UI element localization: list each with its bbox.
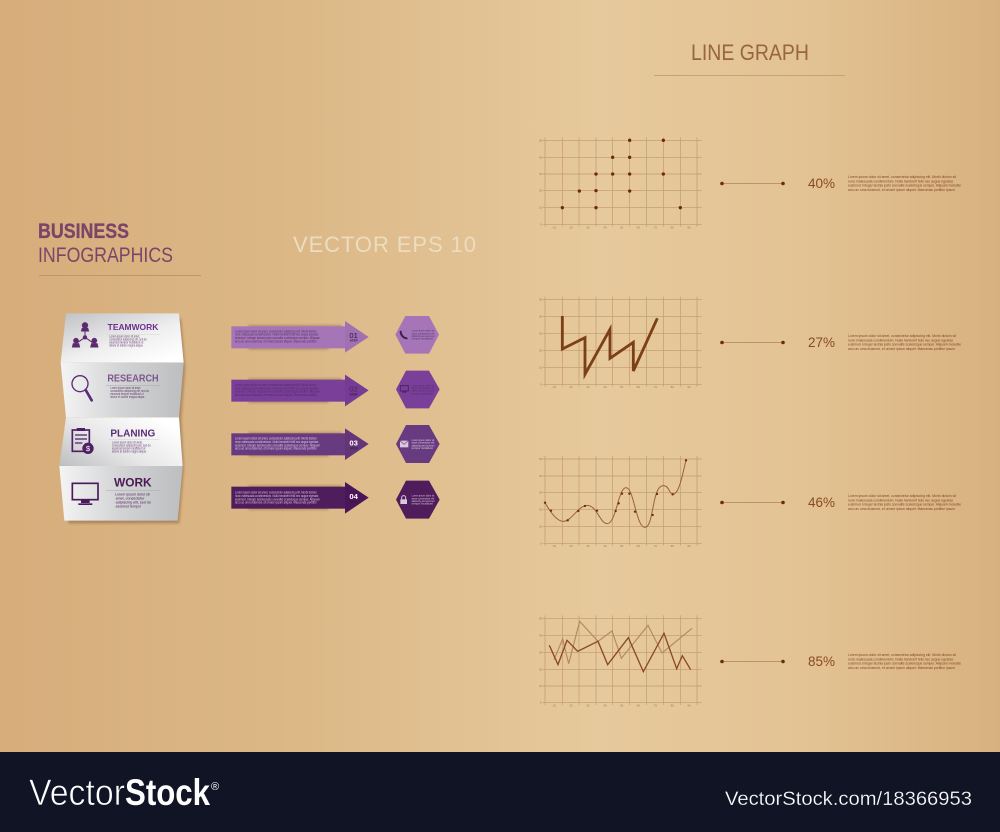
logo: Vector [29, 772, 125, 813]
stat row: 85% [720, 652, 962, 670]
chart: two line series: 30 [586, 704, 590, 708]
stat row: 46%: euismod. Integer lacinia justo convallis scelerisque semper. Aliquam molestie [848, 502, 962, 507]
stat row: 40%: Lorem ipsum dolor sit amet, consectetur adipiscing elit. Morbi dictum sit [848, 174, 957, 179]
arrow: step 02: euismod. Integer lacinia justo convallis scelerisque semper. Aliquam [235, 390, 320, 394]
chart: two line series: 70 [654, 704, 657, 708]
hexagon: monitor: adipiscing sed eiusmod [412, 389, 435, 393]
panel: work [59, 466, 183, 521]
footer bar [0, 752, 1000, 832]
title: business infographics: INFOGRAPHICS [38, 244, 173, 267]
hexagon: mail: Lorem ipsum dolor sit [412, 438, 435, 442]
text: teamwork [109, 335, 147, 348]
logo [29, 772, 219, 813]
chart: thick zigzag line: 30 [539, 331, 543, 335]
chart: scatter plot: 30 [586, 226, 590, 230]
chart: scatter plot: 40 [603, 226, 607, 230]
text: work: adipiscing elit, sed do [116, 501, 151, 505]
hexagon: phone: adipiscing sed eiusmod [412, 334, 435, 338]
hexagon: monitor: tempor incididunt [412, 391, 433, 395]
chart: smooth curve: 10 [539, 524, 543, 528]
chart: two line series: 10 [553, 704, 556, 708]
icon: monitor [72, 483, 98, 505]
chart: smooth curve: 50 [620, 544, 624, 548]
arrow: step 01: nunc malesuada condimentum. Nulla hendrerit felis nec augue egestas [235, 333, 319, 337]
hexagon: monitor: amet consectetur elit [412, 386, 435, 390]
arrow: step 02: STEP [350, 393, 358, 397]
chart: thick zigzag line: 20 [569, 385, 573, 389]
stat row: 40%: euismod. Integer lacinia justo convallis scelerisque semper. Aliquam molestie [848, 183, 962, 188]
arrow: step 04: nunc malesuada condimentum. Nulla hendrerit felis nec augue egestas [235, 494, 319, 498]
heading: vector eps 10: VECTOR EPS 10 [293, 232, 476, 257]
stat row: 46%: 46% [808, 495, 835, 510]
arrow: step 03: euismod. Integer lacinia justo convallis scelerisque semper. Aliquam [235, 443, 320, 447]
chart: smooth curve: 60 [637, 544, 640, 548]
text: research [110, 386, 149, 399]
hexagon: phone: amet consectetur elit [412, 331, 435, 335]
arrow: step 04 [231, 482, 369, 514]
arrow: step 03: 03 [349, 438, 358, 447]
stat row: 85%: Lorem ipsum dolor sit amet, consectetur adipiscing elit. Morbi dictum sit [848, 652, 957, 657]
arrow: step 04: euismod. Integer lacinia justo convallis scelerisque semper. Aliquam [235, 497, 320, 501]
icon: clipboard with dollar: $ [86, 444, 91, 453]
chart: two line series: 50 [620, 704, 624, 708]
chart: two line series: 90 [687, 704, 691, 708]
chart: scatter plot: 30 [539, 172, 543, 176]
text: planing: Lorem ipsum dolor sit amet, [112, 440, 143, 444]
hexagon: phone: tempor incididunt [412, 337, 433, 341]
stat row: 27%: Lorem ipsum dolor sit amet, consectetur adipiscing elit. Morbi dictum sit [848, 333, 957, 338]
text: planing: consectetur adipiscing elit, sed do [112, 443, 151, 447]
text: work: Lorem ipsum dolor sit [115, 492, 151, 496]
stat row: 40% [720, 174, 962, 192]
text: research: labore et dolore magna aliqua [110, 395, 145, 399]
hexagon: lock: Lorem ipsum dolor sit [412, 494, 435, 498]
chart: smooth curve: 40 [603, 544, 607, 548]
chart: two line series: 40 [603, 704, 607, 708]
text: planing [112, 440, 151, 453]
chart: smooth curve: 40 [539, 474, 543, 478]
chart: thick zigzag line: 0 [540, 382, 542, 386]
stat row: 27% [720, 333, 962, 351]
arrow: step 04: Lorem ipsum dolor sit amet, consectetur adipiscing elit. Morbi dictum [235, 491, 317, 495]
chart: two line series: 20 [539, 667, 543, 671]
panel: folded paper [59, 313, 185, 523]
text: teamwork: Lorem ipsum dolor sit amet, [109, 335, 140, 339]
text: teamwork: labore et dolore magna aliqua [109, 344, 143, 348]
chart: thick zigzag line: 50 [539, 298, 543, 302]
stat row: 27%: euismod. Integer lacinia justo convallis scelerisque semper. Aliquam molestie [848, 342, 962, 347]
chart: scatter plot: 60 [637, 226, 640, 230]
chart: two line series: 60 [637, 704, 640, 708]
logo: ® [211, 781, 219, 793]
hexagon: phone: Lorem ipsum dolor sit [412, 329, 435, 333]
chart: smooth curve: 90 [687, 544, 691, 548]
arrow: step 03: Lorem ipsum dolor sit amet, consectetur adipiscing elit. Morbi dictum [235, 437, 317, 441]
stat row: 85%: 85% [808, 654, 835, 669]
arrow: step 01: STEP [350, 339, 358, 343]
chart: thick zigzag line: 70 [654, 385, 657, 389]
panel: teamwork [61, 313, 184, 363]
image id: VectorStock.com/18366953 [725, 788, 972, 810]
arrow: step 01: euismod. Integer lacinia justo convallis scelerisque semper. Aliquam [235, 336, 320, 340]
stat row: 46% [720, 493, 962, 511]
chart: two line series: 50 [539, 616, 543, 620]
chart: thick zigzag line: 10 [553, 385, 556, 389]
chart: smooth curve: 10 [553, 544, 556, 548]
chart: thick zigzag line: 80 [671, 385, 674, 389]
arrow: step 03 [231, 428, 369, 460]
chart: scatter plot: 50 [539, 138, 543, 142]
chart: scatter plot: 10 [539, 206, 543, 210]
chart: scatter plot: 40 [539, 155, 543, 159]
hexagon: mail [396, 425, 440, 463]
stat row: 85%: nunc malesuada condimentum. Nulla hendrerit felis nec augue egestas [848, 656, 953, 661]
stat row: 27%: 27% [808, 335, 835, 350]
text: work: eiusmod tempor [116, 505, 142, 509]
chart: smooth curve: 0 [540, 541, 542, 545]
icon: magnifier [72, 376, 92, 400]
hexagon: mail: adipiscing sed eiusmod [412, 443, 435, 447]
chart: thick zigzag line: 50 [620, 385, 624, 389]
panel: planing [59, 417, 183, 466]
stat row: 46%: nunc malesuada condimentum. Nulla hendrerit felis nec augue egestas [848, 497, 953, 502]
hexagon: mail: tempor incididunt [412, 446, 433, 450]
chart: thick zigzag line: 40 [539, 315, 543, 319]
arrow: step 02: Lorem ipsum dolor sit amet, consectetur adipiscing elit. Morbi dictum [235, 383, 317, 387]
chart: thick zigzag line: 90 [687, 385, 691, 389]
chart: scatter plot: 80 [671, 226, 674, 230]
heading: work: WORK [114, 477, 152, 490]
chart: smooth curve: 70 [654, 544, 657, 548]
chart: scatter plot: 20 [569, 226, 573, 230]
stat row: 46%: arcu ac urna euismod, et ornare ipsum aliquet. Maecenas porttitor ipsum [848, 506, 956, 511]
arrow: step 03: arcu ac urna euismod, et ornare ipsum aliquet. Maecenas porttitor [235, 447, 317, 451]
title: business infographics [38, 220, 201, 276]
chart: scatter plot: 10 [553, 226, 556, 230]
chart: smooth curve: 20 [539, 508, 543, 512]
stat row: 40%: arcu ac urna euismod, et ornare ipsum aliquet. Maecenas porttitor ipsum [848, 187, 956, 192]
text: research: Lorem ipsum dolor sit amet, [110, 386, 141, 390]
chart: thick zigzag line: 20 [539, 348, 543, 352]
stat row: 27%: nunc malesuada condimentum. Nulla hendrerit felis nec augue egestas [848, 337, 953, 342]
icon: team [72, 322, 98, 347]
chart: two line series: 30 [539, 650, 543, 654]
chart: scatter plot: 20 [539, 189, 543, 193]
arrow: step 03: nunc malesuada condimentum. Nulla hendrerit felis nec augue egestas [235, 440, 319, 444]
chart: scatter plot: 70 [654, 226, 657, 230]
arrow: step 02: nunc malesuada condimentum. Nulla hendrerit felis nec augue egestas [235, 386, 319, 390]
arrow: step 01: Lorem ipsum dolor sit amet, consectetur adipiscing elit. Morbi dictum [235, 329, 317, 333]
chart: two line series: 20 [569, 704, 573, 708]
hexagon: lock: tempor incididunt [412, 502, 433, 506]
arrow: step 01: arcu ac urna euismod, et ornare ipsum aliquet. Maecenas porttitor [235, 339, 317, 343]
text: teamwork: consectetur adipiscing elit, sed do [109, 338, 147, 342]
text: work [115, 492, 151, 509]
logo: Stock [125, 772, 210, 813]
hexagon: monitor: Lorem ipsum dolor sit [412, 383, 435, 387]
text: work: amet, consectetur [116, 497, 145, 501]
chart: scatter plot [539, 137, 702, 230]
stat row: 85%: euismod. Integer lacinia justo convallis scelerisque semper. Aliquam molestie [848, 661, 962, 666]
arrow: step 01: 01 [349, 331, 358, 340]
chart: two line series: 10 [539, 684, 543, 688]
chart: smooth curve: 80 [671, 544, 674, 548]
arrow: step 04: arcu ac urna euismod, et ornare ipsum aliquet. Maecenas porttitor [235, 501, 317, 505]
panel: research [61, 363, 184, 417]
chart: two line series [539, 615, 702, 708]
chart: thick zigzag line [539, 297, 702, 389]
chart: smooth curve: 30 [539, 491, 543, 495]
stat row: 40%: 40% [808, 176, 835, 191]
arrow: step 02: 02 [349, 385, 358, 394]
stat row: 27%: arcu ac urna euismod, et ornare ipsum aliquet. Maecenas porttitor ipsum [848, 346, 956, 351]
title: line graph: LINE GRAPH [691, 40, 809, 65]
title: business infographics: BUSINESS [38, 220, 129, 243]
chart: two line series: 0 [540, 701, 542, 705]
hexagon: lock: adipiscing sed eiusmod [412, 499, 435, 503]
text: planing: labore et dolore magna aliqua [112, 449, 146, 453]
chart: two line series: 80 [671, 704, 674, 708]
chart: smooth curve: 50 [539, 457, 543, 461]
heading: planing: PLANING [110, 428, 156, 439]
text: teamwork: eiusmod tempor incididunt ut [109, 341, 143, 345]
stat row: 85%: arcu ac urna euismod, et ornare ipsum aliquet. Maecenas porttitor ipsum [848, 665, 956, 670]
text: research: eiusmod tempor incididunt ut [110, 392, 144, 396]
chart: thick zigzag line: 30 [586, 385, 590, 389]
arrow: step 04: 04 [349, 492, 359, 501]
arrow: step 02: arcu ac urna euismod, et ornare ipsum aliquet. Maecenas porttitor [235, 393, 317, 397]
chart: scatter plot: 90 [687, 226, 691, 230]
chart: thick zigzag line: 40 [603, 385, 607, 389]
chart: scatter plot: 0 [540, 222, 542, 226]
chart: smooth curve [539, 456, 702, 548]
chart: thick zigzag line: 10 [539, 365, 543, 369]
hexagon: lock: amet consectetur elit [412, 496, 435, 500]
hexagon: lock [396, 481, 440, 519]
heading: research: RESEARCH [107, 374, 159, 385]
chart: two line series: 40 [539, 633, 543, 637]
hexagon: phone [395, 316, 439, 354]
stat row: 40%: nunc malesuada condimentum. Nulla hendrerit felis nec augue egestas [848, 178, 953, 183]
chart: thick zigzag line: 60 [637, 385, 640, 389]
arrow: step 01 [231, 321, 369, 353]
text: planing: eiusmod tempor incididunt ut [112, 446, 145, 450]
steps: arrows and hexagons [231, 316, 440, 519]
chart: smooth curve: 30 [586, 544, 590, 548]
arrow: step 02 [231, 375, 369, 406]
heading: teamwork: TEAMWORK [108, 322, 159, 332]
chart: smooth curve: 20 [569, 544, 573, 548]
hexagon: mail: amet consectetur elit [412, 441, 435, 445]
arrow: step 03: STEP [350, 446, 358, 450]
stat row: 46%: Lorem ipsum dolor sit amet, consectetur adipiscing elit. Morbi dictum sit [848, 493, 957, 498]
text: research: consectetur adipiscing elit, sed do [110, 389, 149, 393]
hexagon: monitor [396, 371, 440, 408]
arrow: step 04: STEP [350, 500, 358, 504]
chart: scatter plot: 50 [620, 226, 624, 230]
